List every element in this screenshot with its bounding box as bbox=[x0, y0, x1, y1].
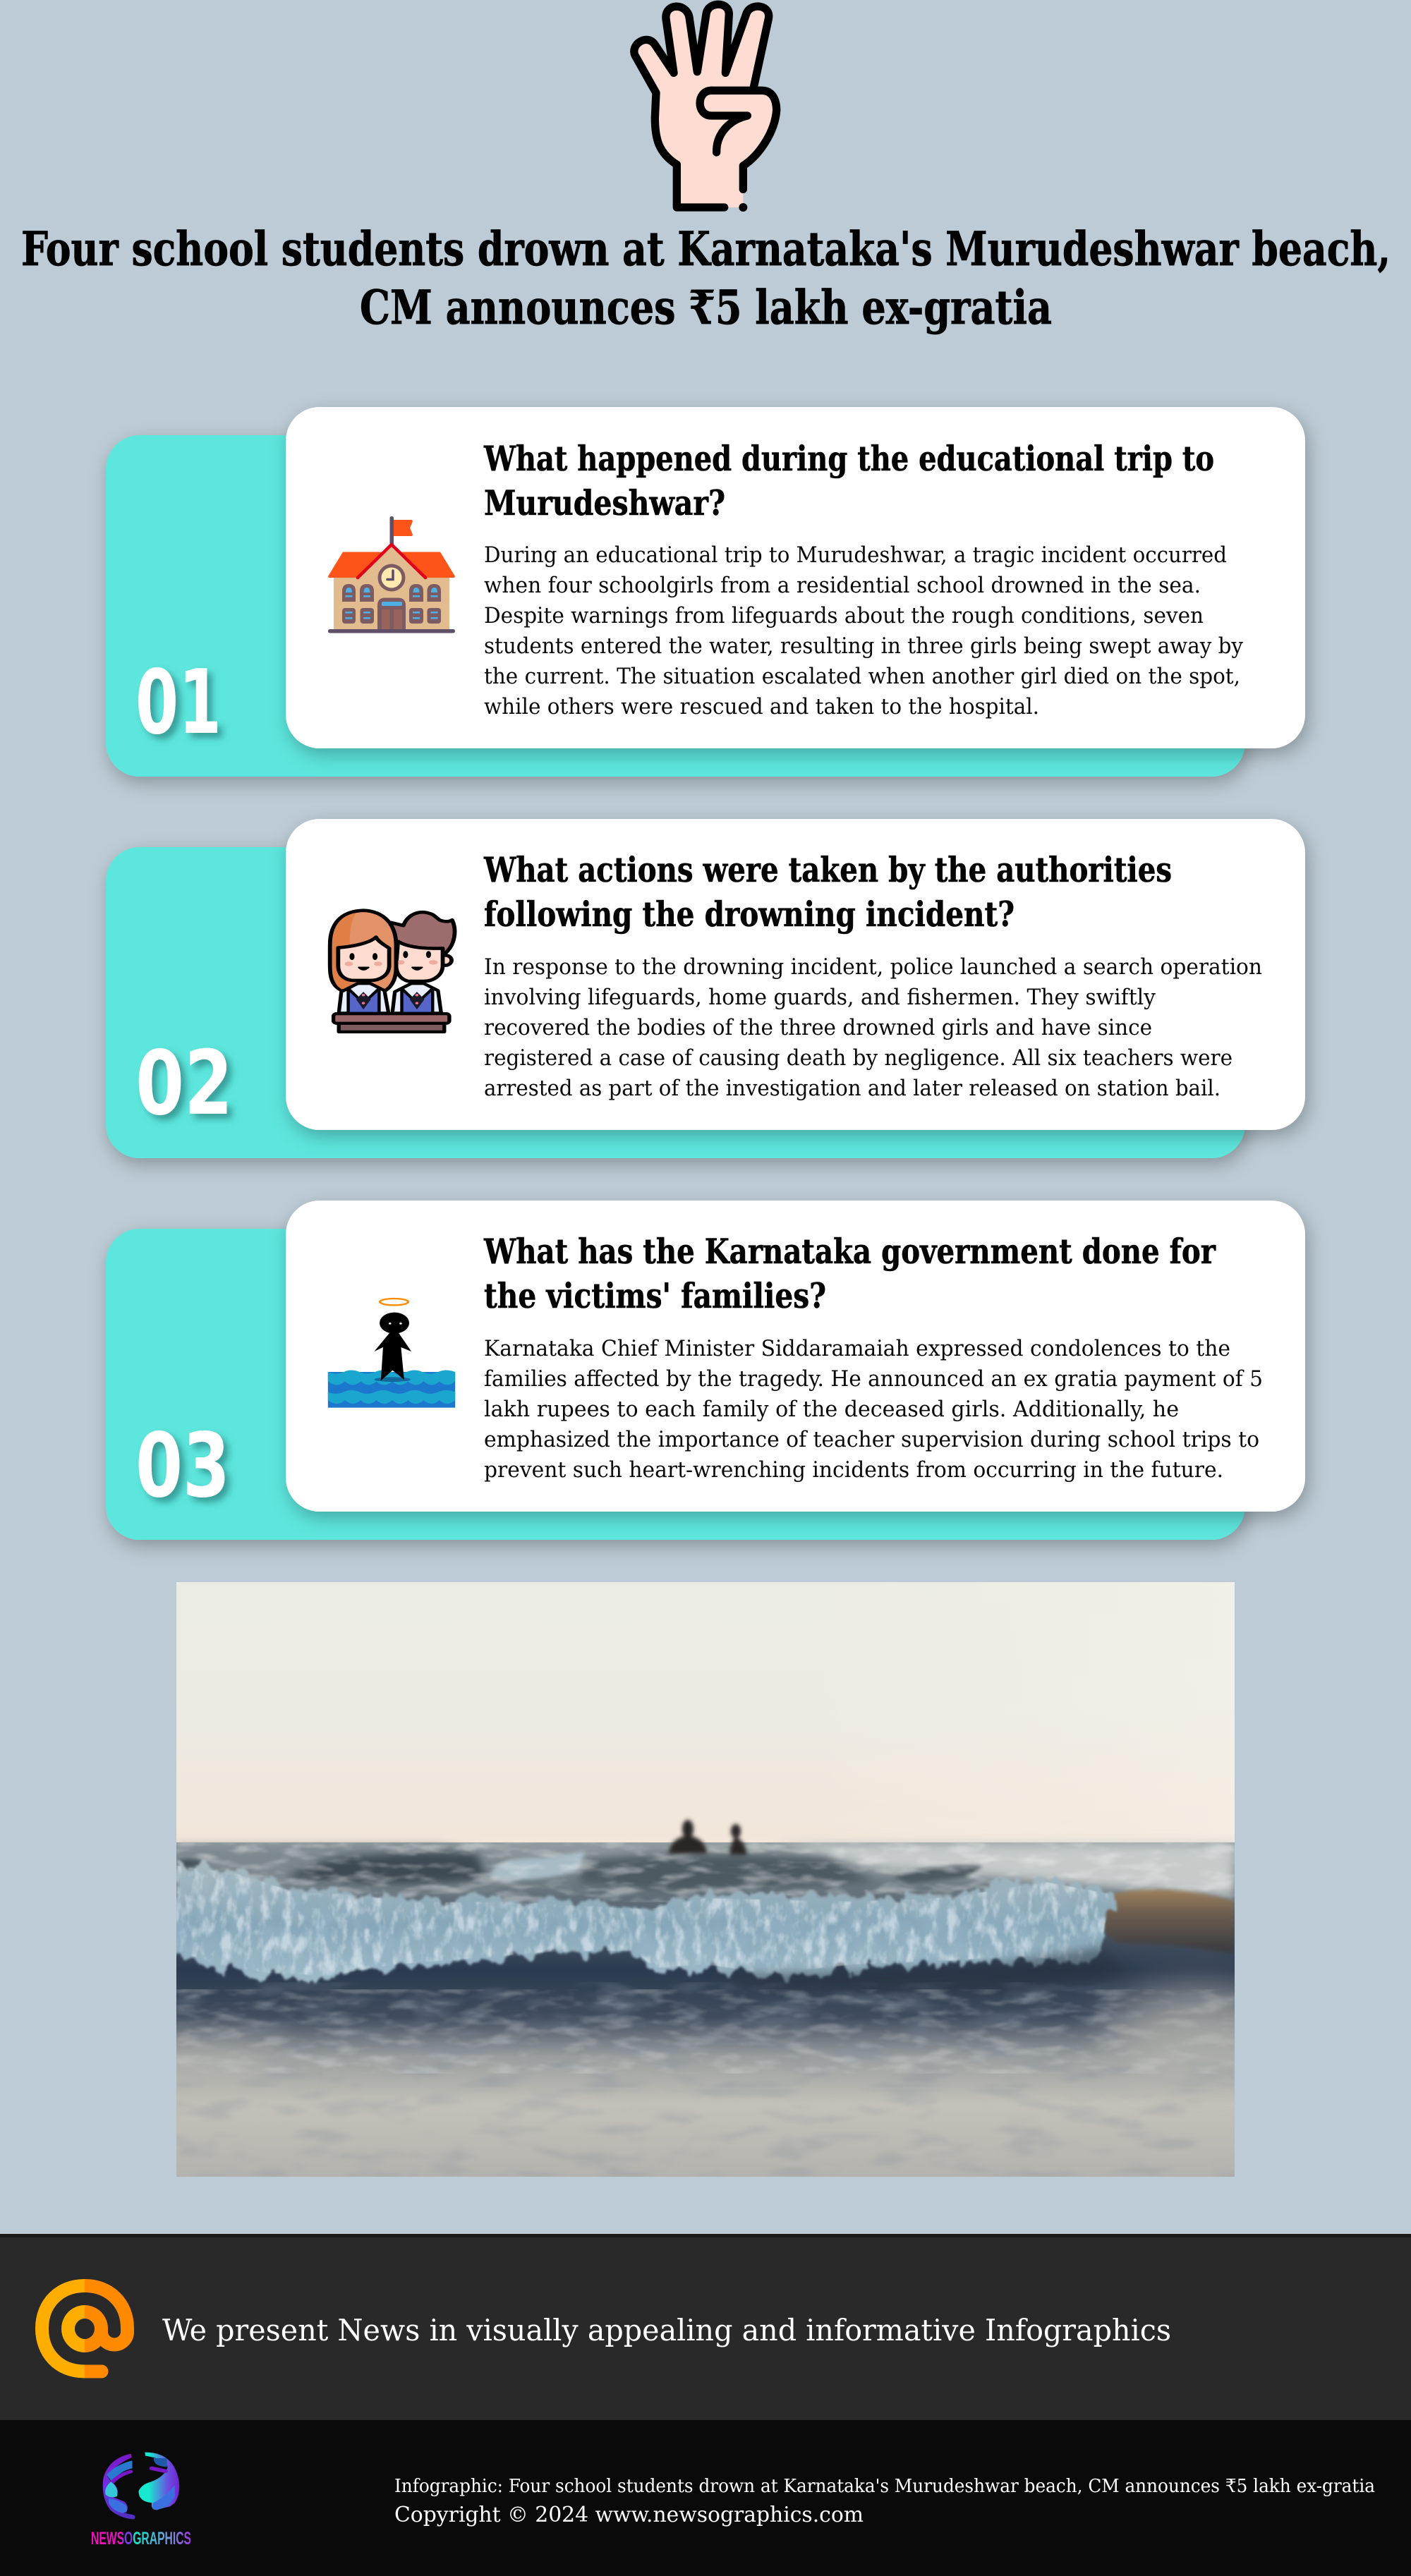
body text 1: Despite warnings from lifeguards about the rough conditions, seven bbox=[484, 603, 1204, 628]
body text 1: while others were rescued and taken to the hospital. bbox=[484, 694, 1039, 719]
icon: school building bbox=[328, 516, 455, 633]
teal backing card 3 bbox=[106, 1229, 1245, 1540]
panel: what happened bbox=[106, 407, 1305, 777]
title bbox=[21, 221, 1391, 335]
body text 3: families affected by the tragedy. He announced an ex gratia payment of 5 bbox=[484, 1366, 1263, 1392]
number 03: 03 bbox=[135, 1414, 230, 1517]
heading 3: What has the Karnataka government done for bbox=[483, 1231, 1216, 1272]
heading 2 bbox=[483, 849, 1172, 935]
body text 1: students entered the water, resulting in three girls being swept away by bbox=[484, 633, 1243, 659]
logo: Newsographics globe bbox=[103, 2453, 179, 2520]
heading 2: What actions were taken by the authorities bbox=[483, 849, 1172, 890]
body text 3 bbox=[484, 1336, 1263, 1483]
icon: at sign bbox=[42, 2285, 127, 2371]
number 01: 01 bbox=[135, 650, 222, 754]
body text 3: lakh rupees to each family of the deceased girls. Additionally, he bbox=[484, 1397, 1179, 1422]
heading 1 bbox=[483, 438, 1214, 523]
body text 2: recovered the bodies of the three drowned girls and have since bbox=[484, 1015, 1152, 1040]
body text 3: emphasized the importance of teacher supervision during school trips to bbox=[484, 1427, 1259, 1452]
white card 2 bbox=[286, 819, 1305, 1130]
heading 3 bbox=[483, 1231, 1216, 1316]
body text 1: During an educational trip to Murudeshwar, a tragic incident occurred bbox=[484, 542, 1227, 568]
footer band: tagline bbox=[0, 2234, 1411, 2420]
heading 2: following the drowning incident? bbox=[484, 894, 1015, 935]
body text 2: registered a case of causing death by negligence. All six teachers were bbox=[484, 1045, 1233, 1071]
tagline text: We present News in visually appealing and informative Infographics bbox=[162, 2313, 1171, 2347]
panel: actions taken bbox=[106, 819, 1305, 1158]
icon: two students at desk bbox=[330, 911, 454, 1032]
credit line: Infographic: Four school students drown at Karnataka's Murudeshwar beach, CM announces ₹5 lakh ex-gratia bbox=[394, 2476, 1375, 2497]
body text 1: the current. The situation escalated when another girl died on the spot, bbox=[484, 664, 1240, 689]
title: CM announces ₹5 lakh ex-gratia bbox=[360, 280, 1052, 335]
logo wordmark: NEWSOGRAPHICS bbox=[91, 2529, 191, 2548]
body text 3: Karnataka Chief Minister Siddaramaiah expressed condolences to the bbox=[484, 1336, 1230, 1361]
body text 2 bbox=[484, 954, 1262, 1101]
icon: hand showing four fingers bbox=[634, 4, 777, 212]
photo: two people in breaking sea waves bbox=[176, 1582, 1235, 2177]
body text 2: involving lifeguards, home guards, and fishermen. They swiftly bbox=[484, 985, 1156, 1010]
copyright line: Copyright © 2024 www.newsographics.com bbox=[394, 2503, 864, 2527]
heading 1: What happened during the educational trip to bbox=[483, 438, 1214, 479]
white card 1 bbox=[286, 407, 1305, 748]
body text 1 bbox=[484, 542, 1243, 719]
body text 2: In response to the drowning incident, police launched a search operation bbox=[484, 954, 1262, 980]
icon: figure with halo standing in water bbox=[328, 1299, 455, 1408]
footer band: credits bbox=[0, 2420, 1411, 2576]
teal backing card 2 bbox=[106, 847, 1245, 1158]
teal backing card 1 bbox=[106, 435, 1245, 777]
white card 3 bbox=[286, 1201, 1305, 1512]
body text 2: arrested as part of the investigation and later released on station bail. bbox=[484, 1076, 1221, 1101]
heading 3: the victims' families? bbox=[484, 1275, 826, 1316]
body text 1: when four schoolgirls from a residential school drowned in the sea. bbox=[484, 573, 1201, 598]
number 02: 02 bbox=[135, 1031, 233, 1135]
panel: government response bbox=[106, 1201, 1305, 1540]
heading 1: Murudeshwar? bbox=[484, 482, 725, 523]
body text 3: prevent such heart-wrenching incidents from occurring in the future. bbox=[484, 1457, 1223, 1483]
